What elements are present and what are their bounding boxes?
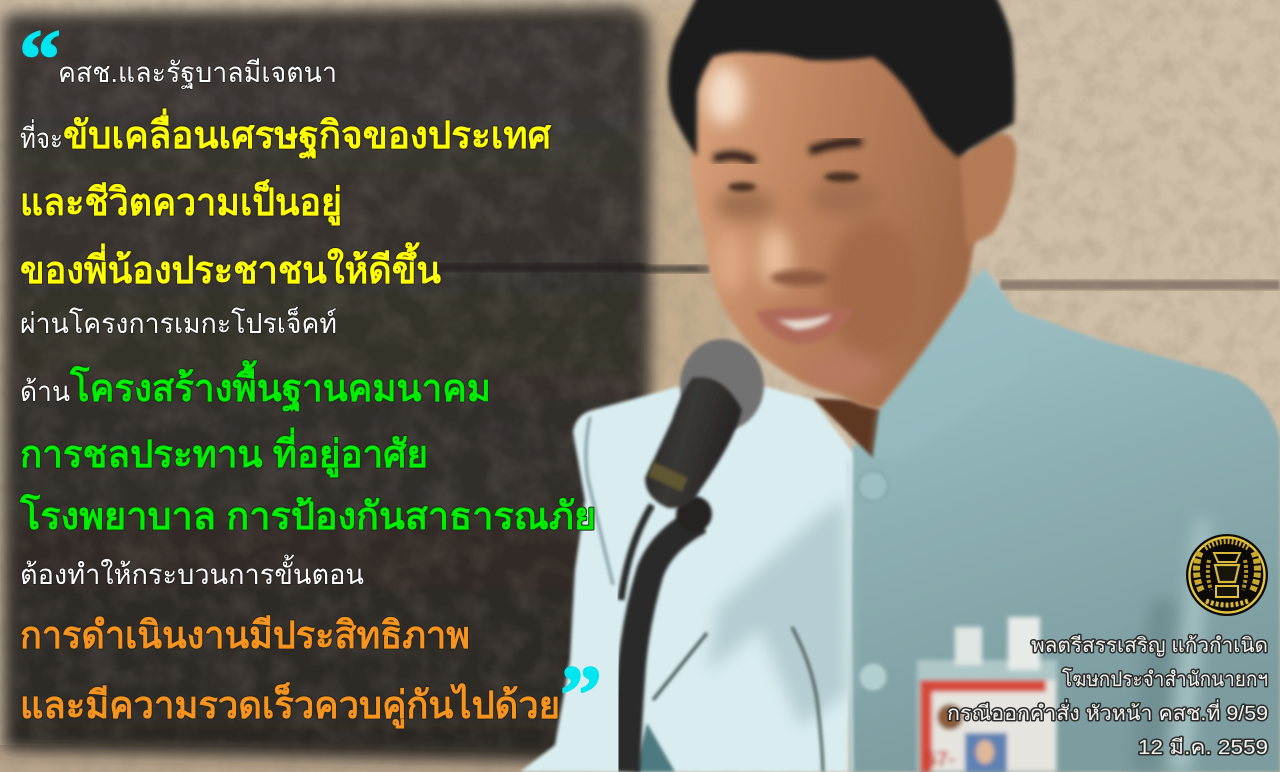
emblem: Office of the Prime Minister seal: [1186, 534, 1268, 616]
caption line: date: 12 มี.ค. 2559: [1138, 737, 1268, 759]
line 8: โรงพยาบาล การป้องกันสาธารณภัย: [19, 493, 596, 538]
nose shadow: [770, 270, 830, 286]
eyebrows: [717, 142, 858, 160]
shirt: shadow area: [707, 497, 848, 727]
line 6: ด้าน: [20, 376, 70, 407]
shirt: creases and lapels: [586, 417, 852, 772]
line 11: และมีความรวดเร็วควบคู่กันไปด้วย: [20, 682, 560, 729]
name badge: [917, 617, 1057, 772]
caption line: subject: กรณีออกคำสั่ง หัวหน้า คสช.ที่ 9/59: [947, 699, 1268, 725]
photograph: speaker: [520, 0, 1280, 772]
mic cable: [621, 505, 652, 600]
line 5: ผ่านโครงการเมกะโปรเจ็คท์: [20, 306, 337, 339]
badge clips: [955, 627, 982, 665]
mic clip: [676, 496, 712, 532]
shirt: left side in light: [520, 387, 853, 772]
badge number: 57-: [925, 748, 955, 771]
line 10: การดำเนินงานมีประสิทธิภาพ: [20, 615, 470, 657]
badge holder: [917, 660, 1057, 772]
shirt collar: [872, 268, 1030, 460]
dark translucent panel behind quote: [0, 0, 660, 772]
eyes: [728, 172, 860, 192]
neck: [813, 398, 880, 458]
badge seal: [937, 704, 963, 730]
shirt: right side in shade: [845, 268, 1280, 772]
hair: [668, 0, 1015, 157]
caption line: position: โฆษกประจำสำนักนายกฯ: [1062, 668, 1268, 691]
line 2: ที่จะ: [20, 119, 63, 154]
shirt: dark teal inner patch: [635, 723, 675, 772]
mic body: [645, 377, 742, 508]
badge photo: [965, 733, 1007, 772]
opening quotation mark: “: [19, 13, 61, 106]
ear: [960, 133, 1016, 247]
line 3: และชีวิตความเป็นอยู่: [20, 179, 342, 226]
line 9: ต้องทำให้กระบวนการขั้นตอน: [20, 554, 364, 590]
line 6: โครงสร้างพื้นฐานคมนาคม: [69, 360, 491, 413]
face light and shade: [705, 65, 923, 388]
mic ring: [648, 462, 688, 492]
microphone: [621, 339, 764, 772]
mic stand: [626, 520, 700, 772]
line 4: ของพี่น้องประชาชนให้ดีขึ้น: [20, 242, 441, 292]
caption line: name: พลตรีสรรเสริญ แก้วกำเนิด: [1031, 635, 1268, 657]
mic head: [680, 339, 764, 431]
line 6: [20, 360, 491, 413]
line 7: การชลประทาน ที่อยู่อาศัย: [20, 427, 428, 478]
line 2: ขับเคลื่อนเศรษฐกิจของประเทศ: [63, 108, 552, 160]
mouth: [755, 306, 853, 344]
shirt buttons: [858, 471, 888, 691]
caption: speaker and date: [947, 635, 1268, 759]
shirt: fold on right: [1130, 520, 1210, 772]
face: [691, 50, 976, 408]
badge card: [920, 680, 1056, 772]
closing quotation mark: ”: [560, 649, 602, 742]
line 1: คสช.และรัฐบาลมีเจตนา: [58, 57, 337, 89]
quote text: [19, 13, 602, 742]
